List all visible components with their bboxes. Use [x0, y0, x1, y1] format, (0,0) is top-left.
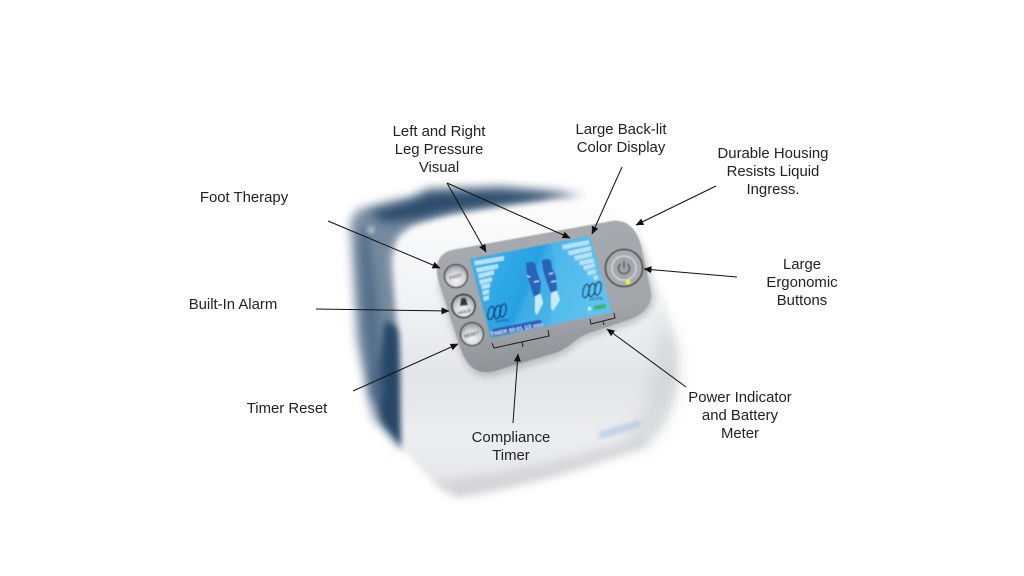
label: power indicator: Meter	[721, 426, 759, 442]
label: durable housing: Resists Liquid	[727, 164, 819, 180]
label: foot therapy: Foot Therapy	[200, 190, 289, 206]
strap dark band	[368, 190, 570, 222]
screen	[470, 236, 612, 338]
strap dark lower part	[374, 320, 403, 448]
strap highlight	[368, 226, 374, 234]
timer text: TIMER 00:01 1/2 min	[490, 322, 544, 338]
arrow: back-lit display	[592, 167, 622, 234]
arrows	[316, 167, 737, 423]
control panel	[437, 221, 654, 377]
label: built-in alarm: Built-In Alarm	[189, 297, 277, 313]
arrow: built-in alarm	[316, 309, 449, 311]
arrow: compliance timer	[513, 354, 518, 423]
logo	[599, 420, 640, 439]
right brace	[542, 259, 557, 293]
button: hold	[452, 294, 475, 318]
bracket: power indicator	[590, 313, 615, 325]
label: compliance timer: Compliance	[472, 430, 550, 446]
right mmHg: mmHg	[589, 295, 603, 302]
label: timer reset: Timer Reset	[247, 401, 328, 417]
label: durable housing: Ingress.	[747, 182, 799, 198]
left pressure readout	[487, 303, 507, 320]
power button	[606, 250, 642, 286]
label: compliance timer	[472, 430, 550, 464]
button: foot: FOOT	[449, 272, 463, 281]
button: hold: HOLD	[458, 307, 472, 316]
label: leg pressure visual: Leg Pressure	[395, 142, 483, 158]
power LED	[626, 280, 630, 284]
label: power indicator	[688, 390, 792, 442]
legs	[526, 259, 560, 315]
button: foot	[444, 264, 468, 288]
arrow: power indicator	[607, 329, 686, 387]
label: back-lit display: Color Display	[577, 140, 666, 156]
left mmHg: mmHg	[495, 317, 509, 324]
device body	[350, 186, 678, 497]
housing right shading	[625, 310, 677, 450]
label: leg pressure visual: Visual	[419, 160, 459, 176]
label: ergonomic buttons: Ergonomic	[766, 275, 838, 291]
arrow: right leg pressure	[447, 183, 570, 238]
right pressure readout	[582, 281, 602, 298]
label: durable housing: Durable Housing	[718, 146, 828, 162]
arrow: durable housing	[636, 186, 716, 225]
left foot	[535, 294, 543, 315]
label: ergonomic buttons: Large	[783, 257, 821, 273]
right pressure bars	[562, 240, 598, 280]
bracket: compliance timer	[492, 330, 549, 348]
label: ergonomic buttons	[766, 257, 838, 309]
label: leg pressure visual: Left and Right	[393, 124, 486, 140]
housing bottom rim	[432, 436, 648, 497]
arrow: left leg pressure	[447, 183, 486, 252]
label: power indicator: Power Indicator	[688, 390, 792, 406]
arrow: ergonomic buttons	[644, 269, 737, 277]
arrow: foot therapy	[328, 221, 440, 268]
label: ergonomic buttons: Buttons	[777, 293, 827, 309]
button: reset	[460, 322, 484, 346]
button: reset: RESET	[464, 330, 480, 339]
left brace	[526, 262, 541, 297]
right foot	[551, 291, 560, 311]
label: leg pressure visual	[393, 124, 486, 176]
label: compliance timer: Timer	[492, 448, 530, 464]
strap	[350, 186, 585, 450]
timer bar	[492, 320, 542, 336]
label: power indicator: and Battery	[702, 408, 779, 424]
label: back-lit display	[575, 122, 667, 156]
label: back-lit display: Large Back-lit	[575, 122, 667, 138]
arrow: timer reset	[353, 344, 458, 391]
label: durable housing	[718, 146, 828, 198]
left pressure bars	[474, 256, 504, 302]
housing	[396, 200, 678, 497]
battery meter	[588, 307, 591, 310]
